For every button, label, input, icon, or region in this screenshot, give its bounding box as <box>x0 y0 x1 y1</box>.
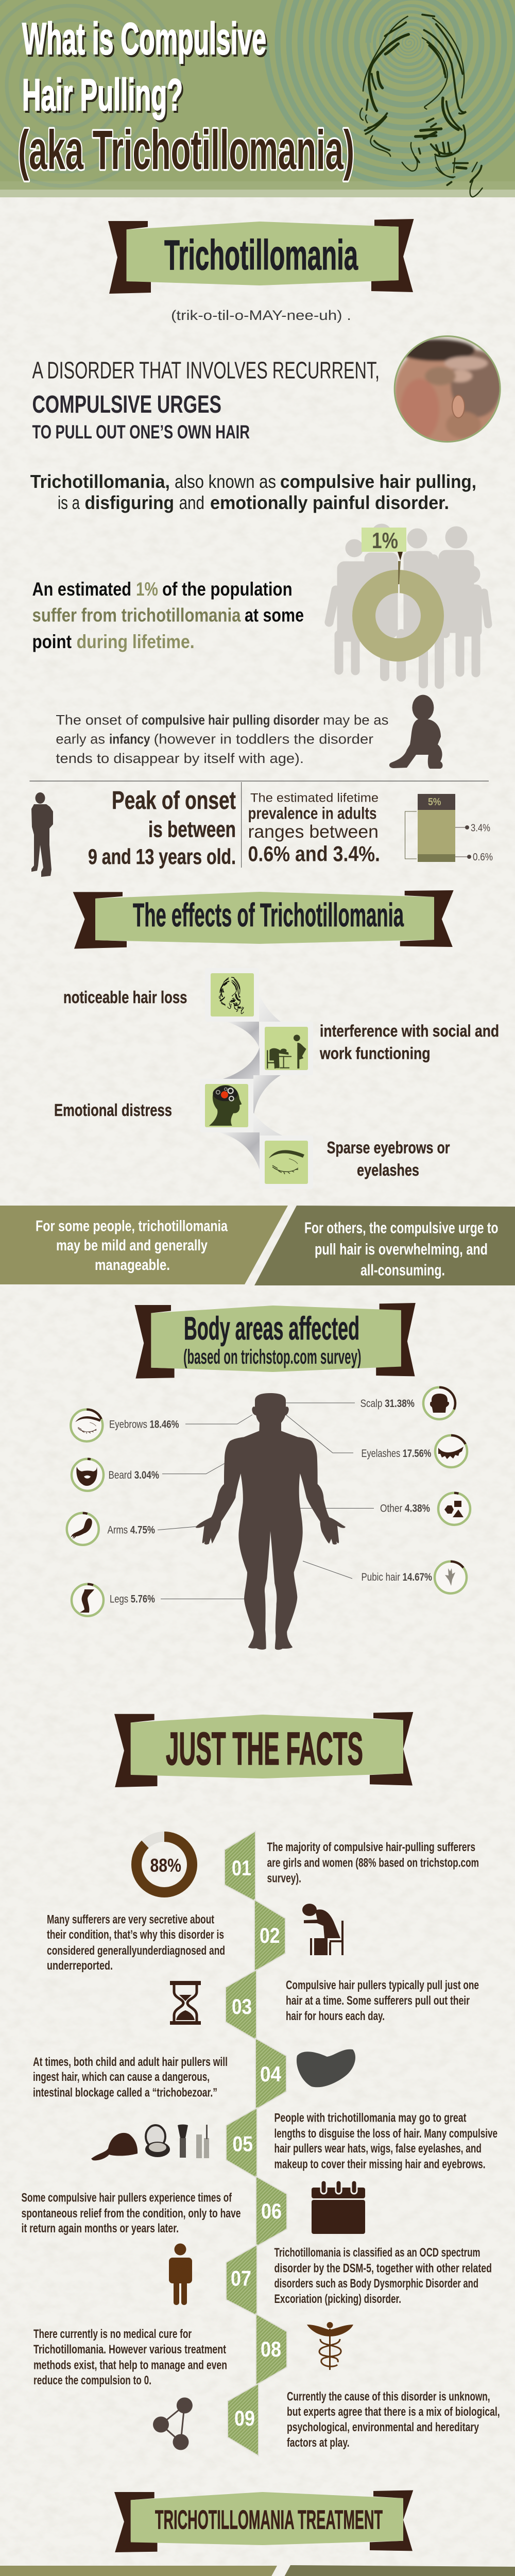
banner: chronic vs treatable <box>0 2565 515 2576</box>
prevalence text: An estimated <box>32 579 131 600</box>
lifetime prevalence text: 0.6% and 3.4%. <box>248 842 380 866</box>
chart: stacked prevalence bar: 0.6% <box>473 852 493 863</box>
label: arms: Arms 4.75% <box>107 1524 155 1536</box>
fact text <box>286 1978 479 2023</box>
onset text: infancy <box>109 732 150 747</box>
donut <box>364 581 433 650</box>
label: arms <box>67 1513 155 1545</box>
onset text: early as <box>56 732 105 747</box>
fact text: their condition, that’s why this disorder is <box>47 1928 224 1942</box>
title: What is Compulsive <box>22 14 266 64</box>
fact text <box>33 2055 228 2100</box>
icons: hat and makeup <box>91 2125 209 2160</box>
chart: 88% donut: 88% <box>150 1855 181 1876</box>
prevalence text: at some <box>245 605 304 626</box>
timeline: facts ribbon <box>225 1832 286 2455</box>
definition text: COMPULSIVE URGES <box>32 391 221 418</box>
icon: network of causes <box>153 2398 193 2450</box>
heading ribbon: body areas: Body areas affected <box>184 1311 359 1347</box>
label: scalp <box>360 1387 455 1419</box>
banner: mild vs overwhelming <box>0 1206 515 1285</box>
lifetime prevalence text: prevalence in adults <box>248 804 377 823</box>
tile: sparse eyebrows <box>260 1136 313 1189</box>
timeline numbers: 07 <box>231 2266 251 2291</box>
heading ribbon: body areas <box>135 1303 416 1379</box>
label: pubic hair <box>362 1562 467 1594</box>
fact text: Trichotillomania. However various treatment <box>33 2343 226 2357</box>
banner: mild vs overwhelming: manageable. <box>95 1257 170 1274</box>
timeline segments <box>225 1832 286 2455</box>
fact text <box>22 2191 241 2235</box>
connectors <box>219 994 282 1170</box>
icon: group of people <box>329 524 488 684</box>
definition text: A DISORDER THAT INVOLVES RECURRENT, <box>32 357 380 383</box>
icon: person sitting <box>302 1904 342 1955</box>
effect labels <box>54 988 499 1179</box>
onset text: may be as <box>323 713 388 728</box>
intro statement: emotionally painful disorder. <box>210 492 449 513</box>
fact text: it return again months or years later. <box>22 2222 179 2235</box>
label: beard <box>72 1459 159 1491</box>
heading ribbon: just the facts <box>114 1712 413 1787</box>
chart: stacked prevalence bar <box>405 794 493 863</box>
fact text: intestinal blockage called a “trichobezoar.” <box>33 2086 217 2100</box>
icon: toddler silhouette <box>389 695 443 769</box>
onset text <box>56 713 388 766</box>
timeline numbers: 05 <box>233 2132 253 2156</box>
fact text: factors at play. <box>287 2436 350 2450</box>
fact text: spontaneous relief from the condition, only to have <box>22 2207 241 2221</box>
fact text: Many sufferers are very secretive about <box>47 1912 214 1927</box>
fact text: survey). <box>267 1872 301 1886</box>
title <box>18 14 354 181</box>
fact text: hair for hours each day. <box>286 2009 385 2023</box>
fact text <box>274 2246 492 2306</box>
label: eyelashes: Eyelashes 17.56% <box>362 1448 432 1460</box>
fact 4 <box>33 2049 355 2100</box>
intro statement <box>30 471 476 513</box>
effect labels: Emotional distress <box>54 1100 172 1120</box>
photo: scalp with hair loss <box>391 335 505 444</box>
effects flow <box>54 968 499 1189</box>
fact 1 <box>136 1837 479 1892</box>
peak of onset text: Peak of onset <box>112 787 236 815</box>
label: beard: Beard 3.04% <box>108 1469 159 1481</box>
onset text: The onset of <box>56 713 139 728</box>
fact text: At times, both child and adult hair pullers will <box>33 2055 228 2069</box>
fact text: Excoriation (picking) disorder. <box>274 2292 401 2306</box>
prevalence text: of the population <box>162 579 293 600</box>
label: legs <box>72 1584 155 1616</box>
fact text <box>274 2111 497 2171</box>
intro statement: compulsive hair pulling, <box>280 471 476 492</box>
definition text <box>32 357 380 443</box>
icon: caduceus <box>307 2322 353 2370</box>
fact text: ingest hair, which can cause a dangerous, <box>33 2070 210 2084</box>
fact text <box>47 1912 225 1973</box>
fact 5 <box>91 2111 497 2171</box>
fact 8 <box>33 2322 353 2387</box>
fact text: reduce the compulsion to 0. <box>33 2374 151 2387</box>
onset text: tends to disappear by itself with age). <box>56 751 304 766</box>
label: other <box>380 1493 470 1525</box>
lifetime prevalence text: ranges between <box>248 822 379 842</box>
icon: teenager silhouette <box>31 792 53 877</box>
label: 1%: 1% <box>372 528 398 553</box>
intro statement: disfiguring <box>84 492 174 513</box>
fact 3 <box>170 1978 479 2025</box>
lifetime prevalence text <box>248 791 380 866</box>
intro statement: also known as <box>175 471 276 492</box>
icon: trichobezoar <box>297 2049 355 2087</box>
chart: body areas affected <box>67 1387 470 1650</box>
chart: 1% of population donut over people <box>329 524 488 684</box>
banner: mild vs overwhelming: For some people, trichotillomania <box>36 1217 228 1234</box>
onset text: (however in toddlers the disorder <box>153 732 373 747</box>
effect labels: Sparse eyebrows or <box>327 1139 450 1157</box>
fact 2 <box>47 1904 342 1973</box>
tile: social and work <box>260 1022 313 1075</box>
intro statement: Trichotillomania, <box>30 471 170 492</box>
icon: hourglass <box>170 1981 201 2025</box>
tile: hair loss <box>205 968 259 1022</box>
banner: mild vs overwhelming: all-consuming. <box>360 1261 445 1279</box>
effect labels: work functioning <box>319 1044 431 1062</box>
fact text <box>267 1840 479 1886</box>
timeline numbers: 09 <box>234 2406 255 2430</box>
pronunciation: (trik-o-til-o-MAY-nee-uh) . <box>171 308 351 323</box>
heading ribbon: body areas: (based on trichstop.com survey) <box>183 1346 362 1368</box>
header background with spirals <box>0 0 515 197</box>
leader lines <box>158 1403 374 1599</box>
heading ribbon: treatment <box>114 2490 413 2552</box>
onset text: compulsive hair pulling disorder <box>142 713 319 728</box>
effect labels: noticeable hair loss <box>63 988 187 1007</box>
lifetime prevalence text: The estimated lifetime <box>250 791 379 805</box>
label: other: Other 4.38% <box>380 1502 430 1515</box>
heading ribbon: Trichotillomania: Trichotillomania <box>164 232 358 279</box>
timeline numbers: 08 <box>261 2337 281 2361</box>
peak of onset text: 9 and 13 years old. <box>88 844 236 869</box>
label: pubic hair: Pubic hair 14.67% <box>362 1571 432 1583</box>
title: Hair Pulling? <box>22 70 183 120</box>
banner: mild vs overwhelming: may be mild and generally <box>56 1237 208 1254</box>
label: eyelashes <box>362 1435 467 1467</box>
label: legs: Legs 5.76% <box>110 1594 155 1605</box>
prevalence text: during lifetime. <box>77 631 195 652</box>
chart: stacked prevalence bar: 5% <box>428 796 441 808</box>
label: scalp: Scalp 31.38% <box>360 1398 415 1410</box>
timeline numbers: 02 <box>260 1923 280 1947</box>
fact 7 <box>169 2243 492 2306</box>
timeline numbers: 01 <box>232 1856 251 1880</box>
chart: stacked prevalence bar: 3.4% <box>471 822 490 834</box>
prevalence text: point <box>32 631 72 652</box>
fact 9 <box>153 2390 500 2450</box>
fact text: There currently is no medical cure for <box>33 2327 192 2341</box>
heading ribbon: Trichotillomania <box>108 219 414 294</box>
fact text <box>287 2390 500 2450</box>
prevalence text: 1% <box>136 579 158 600</box>
fact text: underreported. <box>47 1959 113 1973</box>
icon: calendar <box>312 2180 365 2234</box>
timeline numbers: 03 <box>232 1994 252 2019</box>
prevalence text: suffer from trichotillomania <box>32 605 241 626</box>
timeline numbers: 04 <box>260 2062 282 2086</box>
peak of onset text: is between <box>148 817 236 842</box>
fact text <box>33 2327 227 2387</box>
prevalence text <box>32 579 304 652</box>
fact 6 <box>22 2180 365 2235</box>
label: eyebrows <box>71 1410 179 1442</box>
label: eyebrows: Eyebrows 18.46% <box>109 1419 179 1431</box>
timeline numbers: 06 <box>261 2199 282 2223</box>
human body silhouette <box>196 1393 346 1650</box>
intro statement: and <box>179 492 204 513</box>
peak of onset text <box>88 787 236 869</box>
fact text: considered generallyunderdiagnosed and <box>47 1944 225 1958</box>
illustration: hair outline <box>360 14 483 197</box>
chart: 88% donut <box>136 1837 192 1892</box>
section dividers <box>29 781 489 868</box>
definition text: TO PULL OUT ONE’S OWN HAIR <box>32 421 250 443</box>
effect labels: eyelashes <box>357 1161 419 1179</box>
fact text: Some compulsive hair pullers experience times of <box>22 2191 232 2205</box>
timeline numbers <box>231 1856 282 2430</box>
icon: person <box>169 2243 192 2305</box>
header panel <box>0 0 515 197</box>
tile: emotional distress <box>200 1079 253 1132</box>
fact text: methods exist, that help to manage and even <box>33 2359 227 2372</box>
heading ribbon: effects <box>73 890 454 949</box>
intro statement: is a <box>58 492 80 513</box>
